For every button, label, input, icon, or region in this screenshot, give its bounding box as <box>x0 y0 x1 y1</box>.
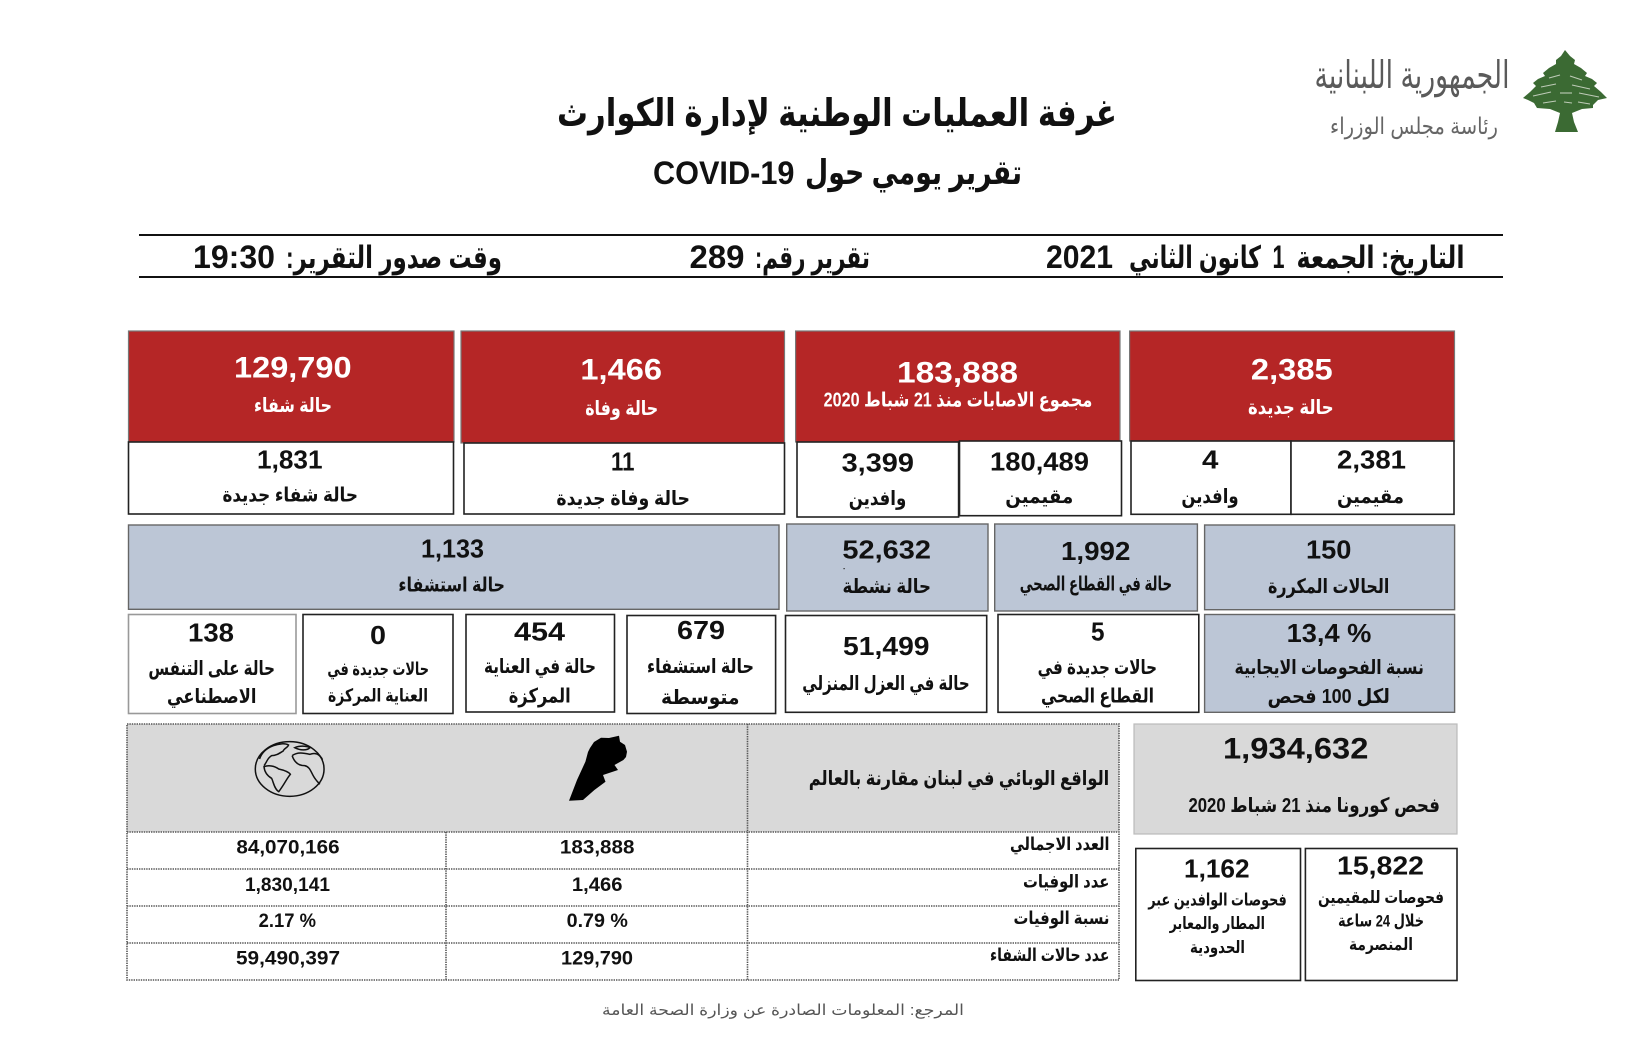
row: deaths <box>245 872 1109 896</box>
date: كانون الثاني <box>1129 240 1262 276</box>
label: حالة استشفاء <box>398 574 505 596</box>
value: 1,162 <box>1184 853 1250 883</box>
panel: total arrivals <box>797 442 959 517</box>
value: 679 <box>677 615 725 645</box>
row: total cases: العدد الاجمالي <box>1010 834 1109 855</box>
value: 52,632 <box>842 535 931 565</box>
label: حالة شفاء <box>254 395 332 417</box>
row: total cases: 183,888 <box>560 837 634 858</box>
date <box>1046 239 1464 276</box>
panel: hospitalised <box>128 525 779 609</box>
label: حالة وفاة <box>585 398 658 420</box>
panel: total tests <box>1134 724 1457 834</box>
row: recoveries: 59,490,397 <box>236 948 340 969</box>
row: recoveries: 129,790 <box>561 948 633 969</box>
panel: arrival tests: الحدودية <box>1190 938 1245 958</box>
panel: arrival tests: المطار والمعابر <box>1169 914 1265 934</box>
panel: new residents <box>1291 441 1454 514</box>
panel: ventilated <box>128 614 296 714</box>
table heading: الواقع الوبائي في لبنان مقارنة بالعالم <box>809 768 1109 791</box>
label: حالات جديدة في <box>1038 657 1157 680</box>
value: 3,399 <box>842 448 914 478</box>
panel: new ICU cases: العناية المركزة <box>328 686 428 706</box>
panel: new recoveries <box>128 442 454 514</box>
row: deaths: 1,830,141 <box>245 875 330 896</box>
panel: moderate hospital cases <box>627 615 776 714</box>
value: 51,499 <box>843 631 930 661</box>
value: 4 <box>1202 444 1219 474</box>
panel: moderate hospital cases: متوسطة <box>661 687 740 709</box>
date: 2021 <box>1046 239 1113 275</box>
panel: new deaths <box>464 443 784 514</box>
label: وافدين <box>849 488 906 510</box>
panel: new health sector cases: القطاع الصحي <box>1041 686 1154 708</box>
label: حالة على التنفس <box>148 658 275 680</box>
row: deaths: عدد الوفيات <box>1023 872 1109 892</box>
label: وافدين <box>1181 486 1239 508</box>
value: 5 <box>1091 617 1105 647</box>
value: 2,385 <box>1251 353 1333 386</box>
row: total cases: 84,070,166 <box>236 837 340 858</box>
value: 129,790 <box>234 351 352 384</box>
row: recoveries: عدد حالات الشفاء <box>990 945 1109 965</box>
panel: deaths <box>461 331 784 443</box>
label: مقيمين <box>1337 486 1404 508</box>
panel: health sector cases <box>995 524 1197 611</box>
panel: recoveries <box>128 331 454 442</box>
value: 138 <box>188 618 234 648</box>
label: حالة استشفاء <box>647 656 754 678</box>
icon: globe <box>255 742 324 796</box>
value: 183,888 <box>897 357 1018 390</box>
row: fatality rate: نسبة الوفيات <box>1014 908 1110 929</box>
subtitle <box>653 154 1022 193</box>
label: مجموع الاصابات منذ 21 شباط 2020 <box>824 390 1092 412</box>
label: نسبة الفحوصات الايجابية <box>1235 657 1424 679</box>
comparison table: Lebanon vs the world <box>127 724 1119 980</box>
row: fatality rate <box>259 908 1109 932</box>
text: Presidency of the Council of Ministers: رئاسة مجلس الوزراء <box>1330 113 1498 140</box>
value: 1,992 <box>1061 536 1130 566</box>
panel: total cases <box>796 331 1120 442</box>
value: 1,466 <box>580 353 662 386</box>
report number: 289 <box>690 239 744 275</box>
label: حالة جديدة <box>1248 397 1334 419</box>
row: deaths: 1,466 <box>572 875 622 896</box>
label: حالة في العزل المنزلي <box>802 673 970 696</box>
icon: cedar tree <box>1523 50 1607 132</box>
label: حالة نشطة <box>842 576 931 598</box>
icon: Lebanon map <box>569 736 627 801</box>
value: 1,934,632 <box>1223 732 1368 765</box>
value: 1,831 <box>257 444 323 474</box>
report number: تقرير رقم: <box>755 240 870 276</box>
logo: Lebanese cedar and presidency of council of ministers <box>1314 50 1607 140</box>
row: fatality rate: 2.17 % <box>259 911 316 932</box>
date: 1 <box>1272 239 1284 275</box>
text: Lebanese Republic: الجمهورية اللبنانية <box>1314 55 1510 98</box>
panel: new cases <box>1130 331 1454 441</box>
report number <box>690 239 870 276</box>
issue time: 19:30 <box>193 239 275 275</box>
panel: resident tests: خلال 24 ساعة <box>1338 912 1424 930</box>
label: فحوصات للمقيمين <box>1318 888 1444 908</box>
row: recoveries <box>236 945 1109 969</box>
row: fatality rate: 0.79 % <box>567 911 628 932</box>
panel: new arrivals <box>1131 441 1291 514</box>
date: التاريخ: الجمعة <box>1296 240 1464 276</box>
value: 454 <box>514 617 566 647</box>
label: مقيمين <box>1005 486 1073 508</box>
label: فحص كورونا منذ 21 شباط 2020 <box>1188 795 1440 817</box>
panel: resident tests: المنصرمة <box>1349 935 1413 955</box>
panel: active cases <box>787 524 988 611</box>
label: حالة في العناية <box>484 656 596 679</box>
panel: arrival tests <box>1136 848 1300 980</box>
panel: ICU cases <box>466 614 614 712</box>
panel: resident tests <box>1305 848 1457 980</box>
value: 180,489 <box>990 447 1089 477</box>
issue time: وقت صدور التقرير: <box>286 240 502 276</box>
value: 150 <box>1306 535 1351 565</box>
value: 2,381 <box>1337 444 1406 474</box>
panel: positivity rate <box>1205 614 1455 712</box>
label: الحالات المكررة <box>1268 576 1389 598</box>
value: 0 <box>370 620 386 650</box>
label: حالة وفاة جديدة <box>556 488 690 510</box>
panel: repeat cases <box>1205 525 1455 610</box>
panel: ICU cases: المركزة <box>509 686 571 708</box>
panel: total residents <box>960 441 1122 516</box>
title: غرفة العمليات الوطنية لإدارة الكوارث <box>557 93 1117 135</box>
panel: new health sector cases <box>998 614 1199 712</box>
panel: new ICU cases <box>303 614 453 714</box>
label: حالة في القطاع الصحي <box>1020 574 1172 596</box>
value: 15,822 <box>1337 850 1424 880</box>
value: 1,133 <box>421 534 484 564</box>
subtitle: COVID-19 <box>653 155 794 191</box>
panel: home isolation <box>786 616 987 712</box>
label: حالات جديدة في <box>327 659 429 680</box>
row: total cases <box>236 834 1109 858</box>
label: فحوصات الوافدين عبر <box>1148 890 1287 910</box>
value: 13,4 % <box>1287 618 1371 648</box>
issue time <box>193 239 502 276</box>
panel: ventilated: الاصطناعي <box>167 686 256 709</box>
label: حالة شفاء جديدة <box>222 484 358 506</box>
value: 11 <box>611 447 635 477</box>
panel: positivity rate: لكل 100 فحص <box>1267 686 1390 708</box>
source note: المرجع: المعلومات الصادرة عن وزارة الصحة العامة <box>602 1002 964 1019</box>
subtitle: تقرير يومي حول <box>805 154 1022 193</box>
report info bar <box>139 234 1503 278</box>
